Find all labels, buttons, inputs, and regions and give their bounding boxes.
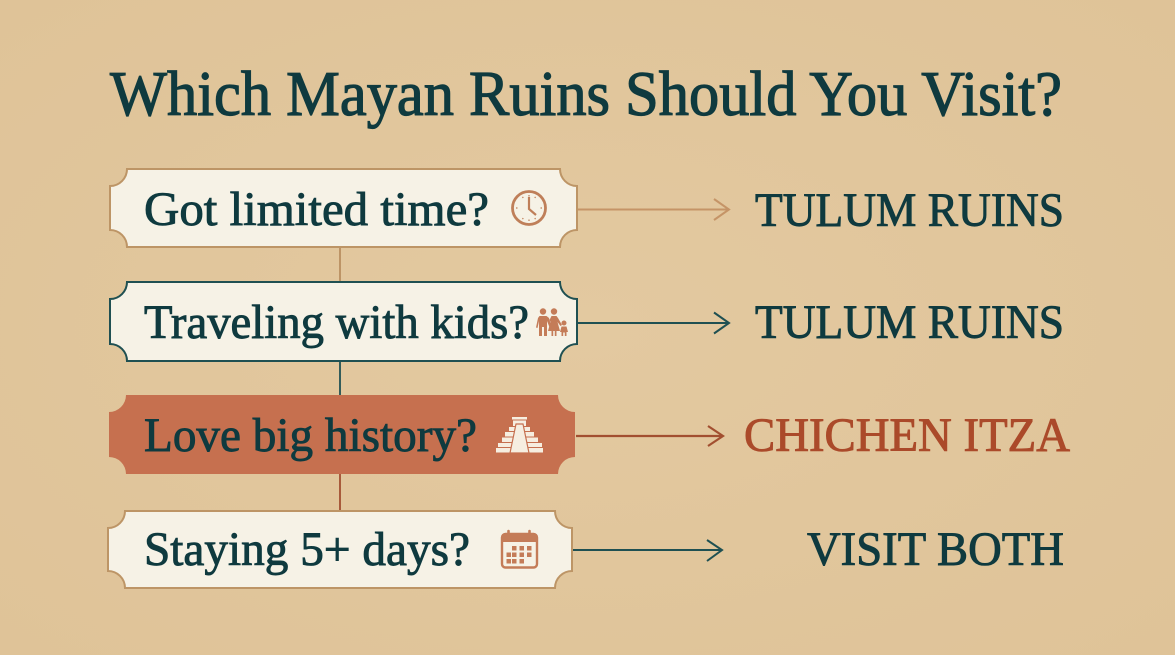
icon: family — [536, 308, 568, 336]
question text 4: Staying 5+ days? — [144, 523, 470, 576]
row 3: love big history (highlighted) — [109, 395, 1070, 474]
question card 3 — [109, 395, 575, 474]
arrow 4 — [573, 540, 722, 561]
row 4: staying 5+ days — [108, 511, 1064, 588]
question card 2 — [110, 282, 577, 361]
question text 3: Love big history? — [144, 409, 477, 462]
answer 2: TULUM RUINS — [755, 296, 1064, 349]
answer 1: TULUM RUINS — [755, 184, 1064, 237]
row 2: traveling with kids — [110, 282, 1064, 361]
question card 4 — [108, 511, 572, 588]
icon: clock — [512, 192, 546, 224]
arrow 3 — [576, 426, 723, 446]
connector: card 1 to card 2 — [339, 247, 341, 282]
title: Which Mayan Ruins Should You Visit? — [110, 59, 1062, 129]
question text 1: Got limited time? — [144, 183, 489, 236]
answer 4: VISIT BOTH — [807, 523, 1064, 576]
arrow 1 — [578, 199, 729, 220]
icon: calendar — [502, 531, 537, 568]
question text 2: Traveling with kids? — [144, 296, 529, 349]
question card 1 — [110, 169, 577, 247]
answer 3: CHICHEN ITZA — [744, 409, 1070, 462]
icon: pyramid — [496, 417, 543, 453]
connector: card 2 to card 3 — [339, 361, 341, 395]
row 1: limited time — [110, 169, 1064, 247]
connector: card 3 to card 4 — [339, 474, 341, 511]
arrow 2 — [578, 312, 729, 334]
